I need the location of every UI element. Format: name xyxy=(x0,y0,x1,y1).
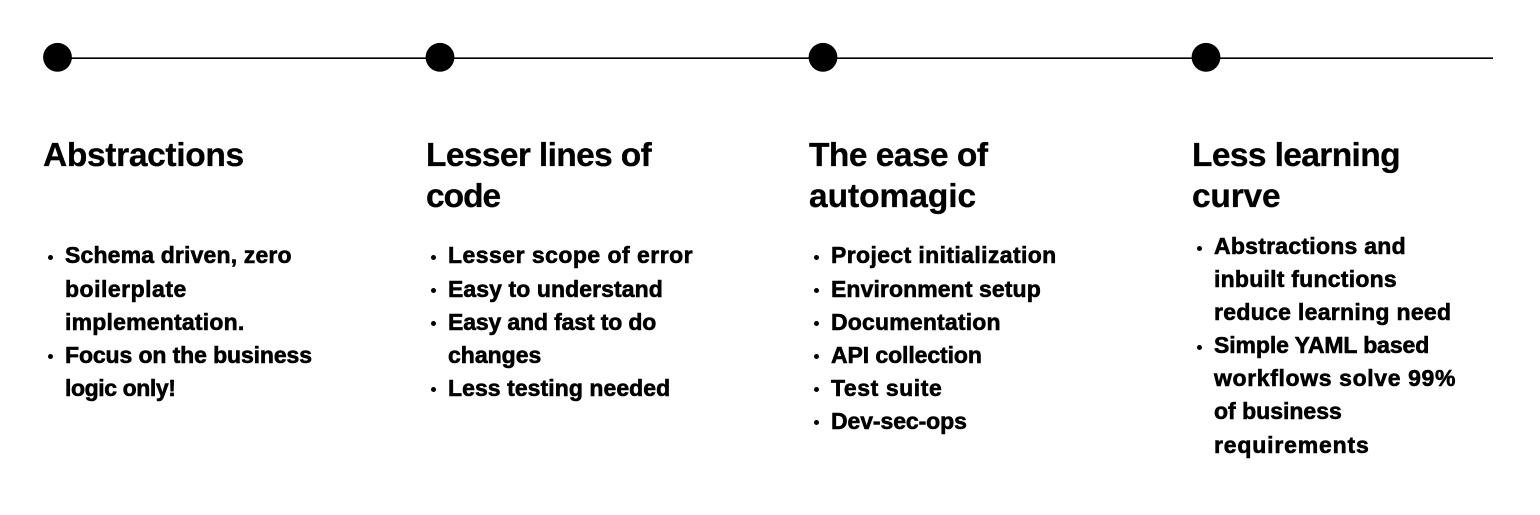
list: Abstractions: Schema driven, zero xyxy=(65,242,292,268)
list: Lesser lines of code: Easy to understand xyxy=(448,276,663,302)
heading: The ease of automagic: The ease of xyxy=(809,137,988,174)
list: Abstractions xyxy=(48,242,312,402)
list: Abstractions: implementation. xyxy=(65,308,245,334)
list: Abstractions: logic only! xyxy=(65,374,176,400)
heading: Less learning curve xyxy=(1192,137,1400,215)
timeline xyxy=(43,42,1493,72)
list: The ease of automagic: Documentation xyxy=(831,308,1001,334)
list: Less learning curve: workflows solve 99% xyxy=(1214,364,1456,390)
heading: The ease of automagic: automagic xyxy=(809,178,976,215)
list: The ease of automagic: API collection xyxy=(831,342,982,368)
heading: Abstractions: Abstractions xyxy=(43,137,244,174)
list: Abstractions: boilerplate xyxy=(65,276,187,302)
list: Less learning curve: inbuilt functions xyxy=(1214,266,1397,292)
heading: Lesser lines of code: code xyxy=(426,178,500,215)
list: The ease of automagic xyxy=(814,242,1057,434)
list: Less learning curve: requirements xyxy=(1214,432,1370,458)
list: Lesser lines of code: Easy and fast to do xyxy=(448,308,656,334)
list: Lesser lines of code xyxy=(431,242,693,402)
list: The ease of automagic: Dev-sec-ops xyxy=(831,408,967,434)
heading: Lesser lines of code: Lesser lines of xyxy=(426,137,651,174)
heading: Less learning curve: curve xyxy=(1192,178,1280,215)
list: Less learning curve: Abstractions and xyxy=(1214,232,1406,258)
list: The ease of automagic: Project initialization xyxy=(831,242,1057,268)
list: Less learning curve: reduce learning need xyxy=(1214,298,1451,324)
list: Abstractions: Focus on the business xyxy=(65,342,312,368)
list: The ease of automagic: Environment setup xyxy=(831,276,1041,302)
list: Lesser lines of code: Less testing needed xyxy=(448,374,670,400)
heading: Less learning curve: Less learning xyxy=(1192,137,1400,174)
list: Less learning curve: of business xyxy=(1214,398,1342,424)
list: Lesser lines of code: changes xyxy=(448,342,541,368)
heading: The ease of automagic xyxy=(809,137,988,215)
list: Lesser lines of code: Lesser scope of error xyxy=(448,242,693,268)
heading: Lesser lines of code xyxy=(426,137,652,215)
list: Less learning curve xyxy=(1197,232,1456,458)
list: Less learning curve: Simple YAML based xyxy=(1214,332,1429,358)
list: The ease of automagic: Test suite xyxy=(831,374,942,400)
